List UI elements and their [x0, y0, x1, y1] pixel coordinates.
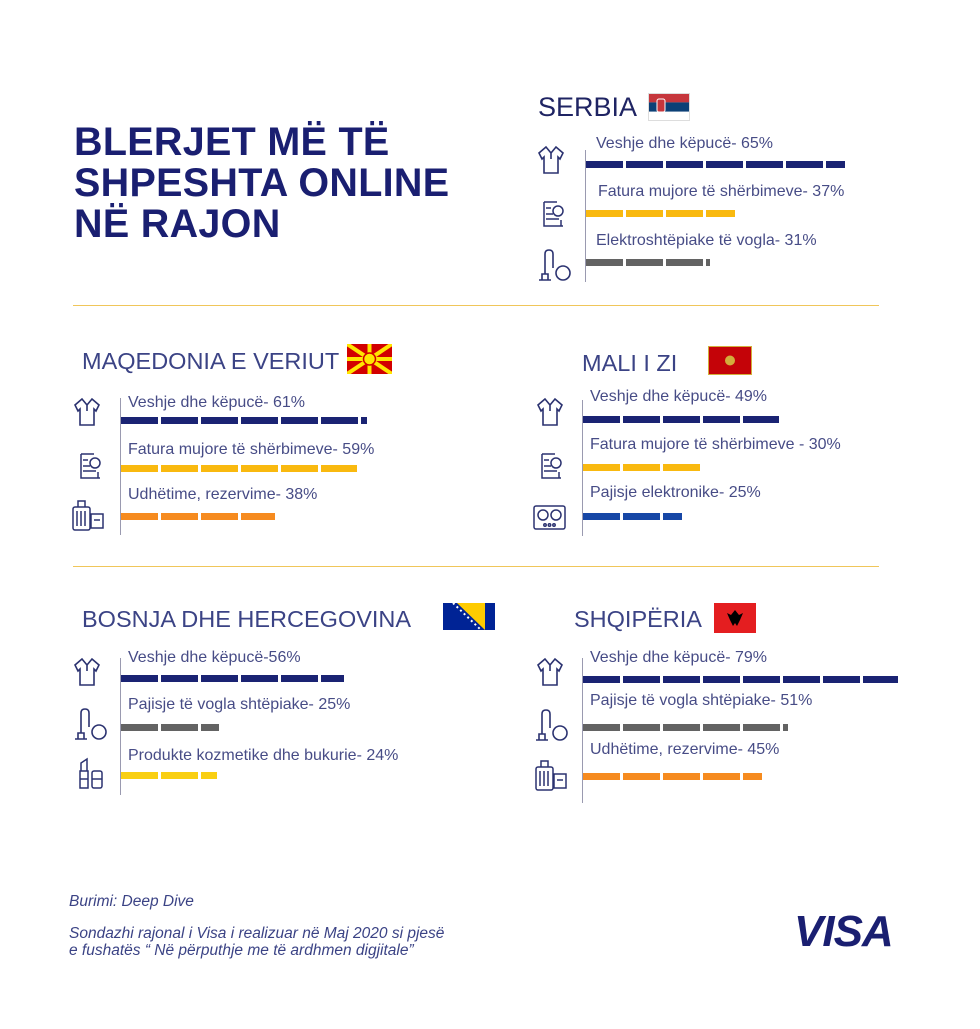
- bar: [586, 161, 845, 168]
- heading: BOSNJA DHE HERCEGOVINA: [82, 606, 411, 632]
- flag: Bosnia: [443, 603, 495, 630]
- heading: Serbia: SERBIA: [538, 92, 637, 122]
- icon: bill: [541, 453, 562, 479]
- bar: [586, 210, 735, 217]
- label: Fatura mujore të shërbimeve - 30%: [590, 436, 841, 453]
- bar: [583, 724, 788, 731]
- icon: shirt: [537, 658, 563, 686]
- label: Veshje dhe këpucë- 61%: [128, 394, 305, 411]
- icon: luggage: [535, 760, 567, 791]
- icon: shirt: [74, 658, 100, 686]
- label: Fatura mujore të shërbimeve- 37%: [598, 183, 844, 200]
- flag: Serbia: [648, 93, 690, 121]
- icon: bill: [80, 453, 101, 479]
- icon: vacuum: [75, 708, 107, 740]
- logo: VISA: VISA: [794, 907, 893, 956]
- panel: Mali i Zi: [533, 346, 841, 536]
- label: Pajisje elektronike- 25%: [590, 484, 761, 501]
- label: Veshje dhe këpucë- 79%: [590, 649, 767, 666]
- source text: Burimi: Deep Dive: [69, 893, 194, 910]
- label: Veshje dhe këpucë- 49%: [590, 388, 767, 405]
- icon: vacuum: [536, 709, 568, 741]
- title: [74, 120, 449, 246]
- flag: North Macedonia: [347, 344, 392, 374]
- icon: cosmetics: [79, 758, 103, 789]
- bar: [121, 772, 217, 779]
- heading: MAQEDONIA E VERIUT: [82, 348, 339, 374]
- title: BLERJET MË TË: [74, 120, 390, 164]
- panel: Bosnja dhe Hercegovina: [74, 603, 495, 795]
- bar: [583, 676, 898, 683]
- survey note: e fushatës “ Në përputhje me të ardhmen digjitale”: [69, 942, 414, 959]
- bar: [121, 417, 367, 424]
- icon: shirt: [538, 146, 564, 174]
- bar: [586, 259, 710, 266]
- panel: Maqedonia e Veriut: [72, 344, 392, 535]
- bar: [583, 464, 701, 471]
- survey note: [69, 925, 444, 959]
- bar: [121, 675, 344, 682]
- heading: SHQIPËRIA: [574, 606, 702, 632]
- bar: [583, 416, 779, 423]
- panel: Serbia: [538, 92, 845, 282]
- panel: Shqipëria: [535, 603, 898, 803]
- survey note: Sondazhi rajonal i Visa i realizuar në Maj 2020 si pjesë: [69, 925, 444, 942]
- label: Elektroshtëpiake të vogla- 31%: [596, 232, 817, 249]
- label: Udhëtime, rezervime- 45%: [590, 741, 779, 758]
- title: SHPESHTA ONLINE: [74, 161, 449, 205]
- bar: [121, 465, 357, 472]
- label: Udhëtime, rezervime- 38%: [128, 486, 317, 503]
- bar: [583, 773, 762, 780]
- label: Veshje dhe këpucë- 65%: [596, 135, 773, 152]
- icon: vacuum: [539, 249, 571, 281]
- label: Produkte kozmetike dhe bukurie- 24%: [128, 747, 398, 764]
- icon: shirt: [74, 398, 100, 426]
- icon: shirt: [537, 398, 563, 426]
- bar: [121, 513, 275, 520]
- flag: Albania: [714, 603, 756, 633]
- label: Pajisje të vogla shtëpiake- 51%: [590, 692, 812, 709]
- bar: [583, 513, 682, 520]
- flag: Montenegro: [708, 346, 752, 375]
- title: NË RAJON: [74, 202, 281, 246]
- label: Pajisje të vogla shtëpiake- 25%: [128, 696, 350, 713]
- icon: stove: [533, 505, 566, 530]
- label: Veshje dhe këpucë-56%: [128, 649, 301, 666]
- heading: MALI I ZI: [582, 350, 677, 376]
- bar: [121, 724, 219, 731]
- icon: bill: [543, 201, 564, 227]
- icon: luggage: [72, 500, 104, 531]
- label: Fatura mujore të shërbimeve- 59%: [128, 441, 374, 458]
